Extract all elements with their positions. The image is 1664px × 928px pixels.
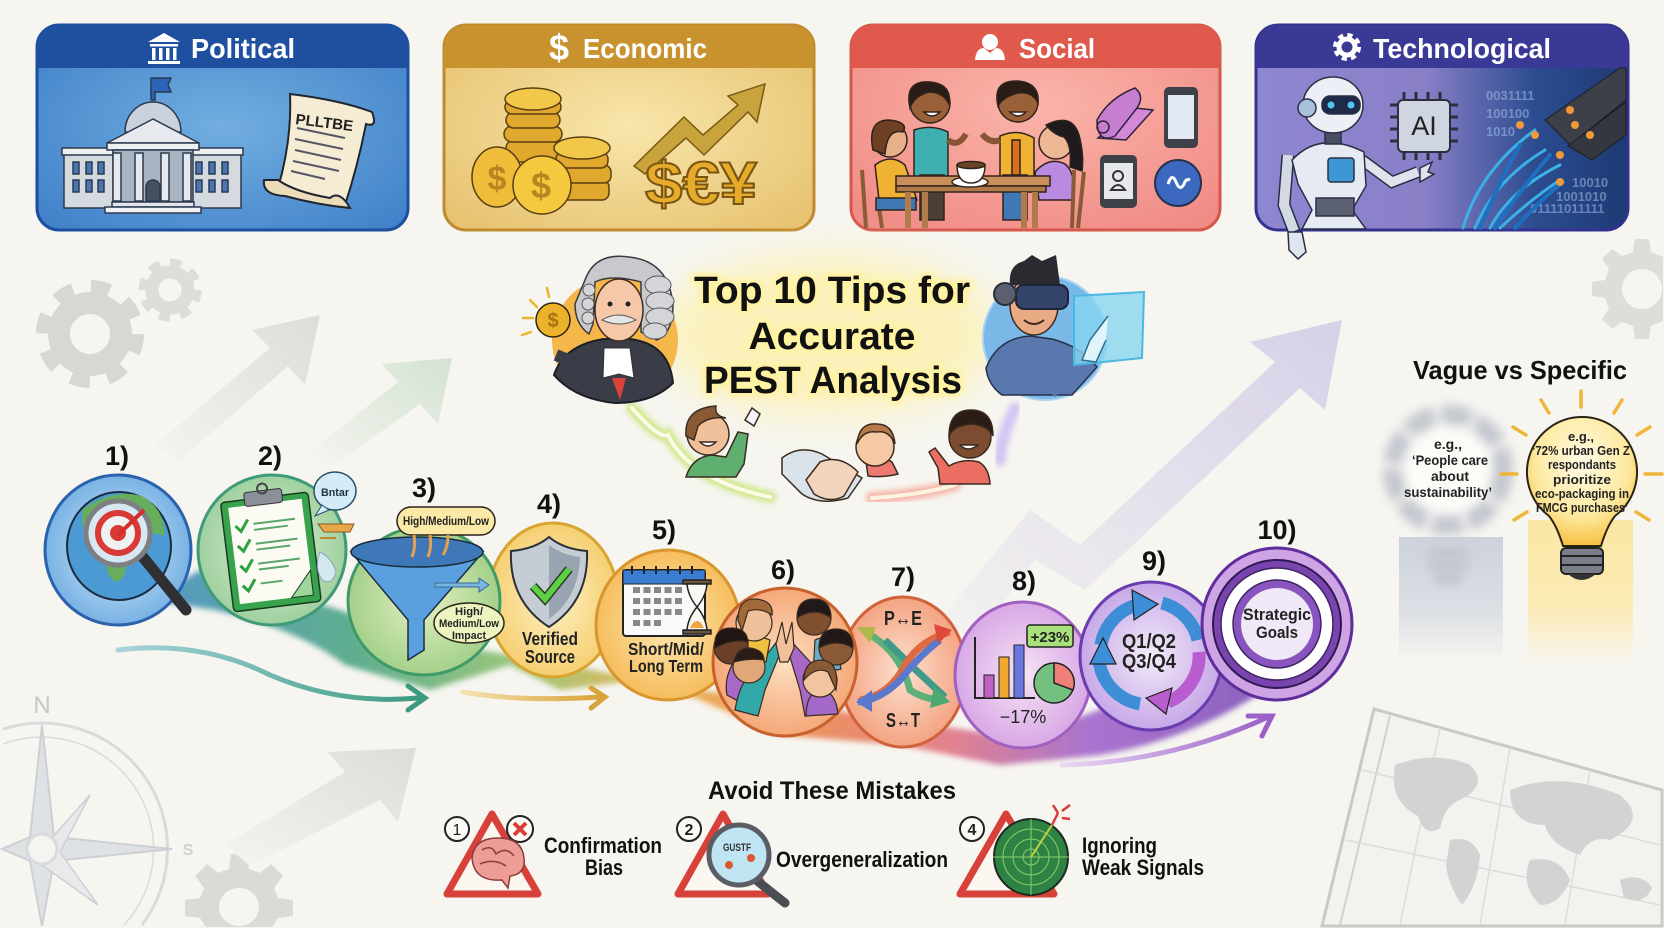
time horizon label: Long Term — [629, 656, 703, 676]
technological heading: Technological — [1373, 33, 1551, 64]
funnel — [351, 537, 483, 660]
illustration: binary data: 0031111 — [1486, 88, 1534, 103]
quarters label — [1122, 631, 1177, 673]
panel: Economic — [444, 25, 814, 230]
title heading: Top 10 Tips for — [694, 270, 970, 312]
number badge — [960, 817, 984, 841]
panel: Social — [851, 25, 1220, 230]
time horizon label: Short/Mid/ — [628, 639, 704, 659]
panel: Political — [37, 25, 408, 230]
kid left — [686, 406, 760, 477]
step numbers: 5) — [652, 515, 676, 545]
plus 23 badge — [1027, 625, 1073, 647]
specific text: ‘72% urban Gen Z — [1532, 443, 1630, 458]
tech header bar — [1256, 25, 1628, 68]
economic header bar — [444, 25, 814, 68]
vague example — [1393, 415, 1503, 662]
title heading — [694, 270, 970, 402]
tip 7: interactions — [840, 597, 966, 747]
step circles — [45, 472, 1352, 748]
gear large left — [43, 287, 137, 381]
verified source label: Source — [525, 647, 575, 667]
illustration: smartphone — [1164, 87, 1198, 148]
compass N label: N — [33, 692, 51, 719]
illustration: binary data: 01111011111 — [1530, 201, 1605, 216]
S T label: S↔T — [886, 710, 920, 732]
illustration: person in VR headset — [983, 255, 1144, 400]
illustration: binary data: 1001010 — [1556, 189, 1607, 204]
illustration: binary data: 100100 — [1486, 106, 1529, 121]
title heading: Top 10 Tips for — [694, 270, 970, 312]
bubble high medium low — [397, 507, 495, 557]
warning triangle — [960, 814, 1054, 894]
kid middle — [856, 424, 898, 477]
icon: temple — [148, 33, 180, 64]
vague text: ‘People care — [1412, 452, 1488, 468]
strategic goals label — [1243, 605, 1311, 642]
brain — [472, 838, 524, 888]
vague text — [1404, 436, 1492, 500]
quarters label: Q1/Q2 — [1122, 631, 1176, 653]
title heading: PEST Analysis — [704, 360, 962, 402]
step numbers: 9) — [1142, 546, 1166, 576]
speech bubble — [314, 472, 356, 516]
icon: gear — [1336, 36, 1358, 58]
blurred bulb — [1393, 415, 1503, 580]
coin symbols: $ — [488, 160, 507, 198]
illustration: coin stacks — [472, 88, 611, 214]
magnifier and target — [86, 501, 186, 610]
economic heading: Economic — [583, 33, 707, 64]
step numbers: 7) — [891, 562, 915, 592]
compass — [2, 723, 172, 926]
label: Weak Signals — [1082, 855, 1204, 880]
tip 10: strategic goals — [1202, 548, 1352, 700]
illustration: tablet — [1100, 155, 1137, 208]
number badge: 1 — [453, 822, 462, 839]
vague vs specific heading: Vague vs Specific — [1413, 355, 1627, 385]
number badge: 4 — [968, 822, 977, 839]
illustration: robot — [1284, 77, 1434, 259]
warning triangle — [447, 814, 538, 894]
crossing arrows — [858, 632, 950, 702]
clipboard — [219, 478, 321, 612]
bubble impact: Impact — [452, 630, 486, 642]
label: Overgeneralization — [776, 847, 948, 872]
title glow — [660, 255, 1000, 415]
tip 5: time horizon — [596, 550, 740, 700]
calendar — [623, 566, 705, 636]
handshake — [782, 450, 862, 501]
specific text — [1532, 429, 1630, 515]
illustration: fibre optic cables — [1463, 68, 1626, 228]
step numbers: 6) — [771, 555, 795, 585]
step numbers: 4) — [537, 489, 561, 519]
mistakes heading: Avoid These Mistakes — [708, 777, 956, 805]
specific text: FMCG purchases’ — [1536, 500, 1628, 515]
verified source label — [522, 629, 578, 667]
illustration: economist in wig: $ — [547, 310, 559, 332]
P E label: P↔E — [884, 608, 922, 630]
political header bar — [37, 25, 408, 68]
light rays — [1501, 391, 1662, 520]
background arrow green — [310, 358, 452, 468]
mistake: overgeneralization — [677, 814, 948, 903]
icon: dollar: $ — [549, 27, 569, 68]
step numbers — [105, 441, 1297, 596]
label: Ignoring — [1082, 833, 1157, 858]
grey column — [1399, 537, 1503, 662]
yellow column — [1528, 520, 1633, 662]
illustration: policy scroll — [264, 94, 374, 208]
specific text: prioritize — [1553, 472, 1611, 487]
social heading: Social — [1019, 33, 1095, 64]
illustration: AI chip — [1390, 92, 1458, 160]
political heading: Political — [191, 33, 295, 64]
illustration: growth arrow — [634, 84, 765, 174]
step numbers: 1) — [105, 441, 129, 471]
tip 3: funnel — [348, 507, 504, 675]
cycle arrows — [1099, 603, 1199, 704]
strategic goals label: Strategic — [1243, 605, 1311, 624]
vague text: about — [1431, 468, 1469, 484]
tip 6: collaboration — [713, 588, 857, 736]
step numbers: 10) — [1257, 515, 1297, 545]
specific text: e.g., — [1568, 429, 1594, 444]
minus 17 label: −17% — [1000, 707, 1046, 727]
illustration: binary data — [1486, 88, 1608, 216]
x badge — [507, 816, 533, 842]
coin symbols — [488, 160, 551, 206]
gear small left — [143, 263, 197, 317]
vague text: sustainability’ — [1404, 484, 1492, 500]
bubble impact: Medium/Low — [439, 618, 499, 630]
tip 2: checklist — [198, 472, 356, 625]
vague text: e.g., — [1434, 436, 1462, 452]
background decorations — [2, 239, 1663, 927]
illustration: coffee cup — [952, 162, 988, 187]
background arrow grey — [155, 315, 320, 462]
specific text: respondants — [1548, 457, 1616, 472]
illustration: yoga mat — [1097, 88, 1153, 140]
plus 23 badge: +23% — [1031, 629, 1069, 646]
tip 1: market scope — [45, 475, 191, 625]
gear right edge — [1592, 239, 1663, 339]
hourglass — [683, 580, 711, 634]
tip 8: quantify — [955, 602, 1091, 748]
illustration: government building — [62, 78, 243, 213]
icon: person — [975, 34, 1005, 60]
small S mark: S — [183, 842, 194, 859]
label — [544, 833, 662, 880]
strategic goals label: Goals — [1256, 623, 1298, 642]
label — [1082, 833, 1204, 880]
background rising zigzag arrow — [940, 320, 1342, 640]
illustration: binary data: 1010 — [1486, 124, 1515, 139]
magnifier — [709, 825, 785, 903]
small arrows and drop — [317, 524, 354, 582]
step numbers: 8) — [1012, 566, 1036, 596]
pie chart — [1034, 663, 1074, 703]
cycle arrow heads — [1090, 590, 1172, 714]
globe — [67, 492, 171, 600]
coin symbols: $ — [531, 165, 551, 206]
illustration: binary data: 10010 — [1572, 175, 1608, 190]
arrow out of funnel — [435, 578, 489, 592]
mistake: confirmation bias — [445, 814, 662, 894]
arrow: teal flow — [118, 648, 425, 710]
tip 4: verified source — [488, 523, 618, 677]
title heading: Accurate — [748, 316, 916, 358]
ribbon trail behind circles — [150, 570, 1265, 765]
team high five — [714, 599, 853, 716]
title heading: Accurate — [748, 316, 916, 358]
specific example — [1501, 391, 1662, 662]
bar chart — [975, 637, 1035, 698]
connecting rainbow loop — [632, 408, 1015, 498]
illustration: AI chip: AI — [1411, 111, 1437, 141]
label: Confirmation — [544, 833, 662, 858]
light bulb — [1527, 417, 1637, 580]
illustration: economist in wig — [522, 256, 678, 403]
illustration: people at table — [862, 81, 1084, 228]
background arrow bottom — [225, 748, 416, 866]
magnifier: GUSTF — [723, 842, 751, 854]
illustration: policy scroll: PLLTBE — [295, 111, 354, 135]
world map — [1322, 709, 1662, 926]
panel: Technological — [1256, 25, 1628, 259]
arrow: gold flow — [463, 688, 605, 708]
bubble impact: High/ — [455, 606, 483, 618]
quarters label: Q3/Q4 — [1122, 651, 1177, 673]
title heading: PEST Analysis — [704, 360, 962, 402]
currency symbols: $€¥ — [645, 150, 758, 217]
mistake: ignoring weak signals — [960, 805, 1204, 895]
step numbers: 2) — [258, 441, 282, 471]
social header bar — [851, 25, 1220, 68]
radar — [993, 805, 1070, 895]
tip 9: quarterly review — [1080, 582, 1222, 730]
arrow heads — [856, 624, 952, 712]
number badge — [445, 817, 469, 841]
gear bottom — [185, 854, 293, 927]
bubble high medium low: High/Medium/Low — [403, 516, 489, 528]
kid right — [929, 410, 993, 484]
illustration: social badge — [1155, 160, 1201, 206]
arrow: purple flow — [1062, 716, 1272, 765]
number badge: 2 — [685, 822, 694, 839]
shield — [511, 537, 587, 627]
label: Bias — [585, 855, 623, 880]
illustration: cheering kids and handshake — [686, 406, 993, 501]
specific text: eco-packaging in — [1535, 486, 1629, 501]
warning triangle — [678, 814, 768, 894]
bubble impact — [434, 603, 504, 643]
verified source label: Verified — [522, 629, 578, 649]
time horizon label — [628, 639, 704, 676]
step numbers: 3) — [412, 473, 436, 503]
speech bubble: Bntar — [321, 487, 350, 499]
number badge — [677, 817, 701, 841]
